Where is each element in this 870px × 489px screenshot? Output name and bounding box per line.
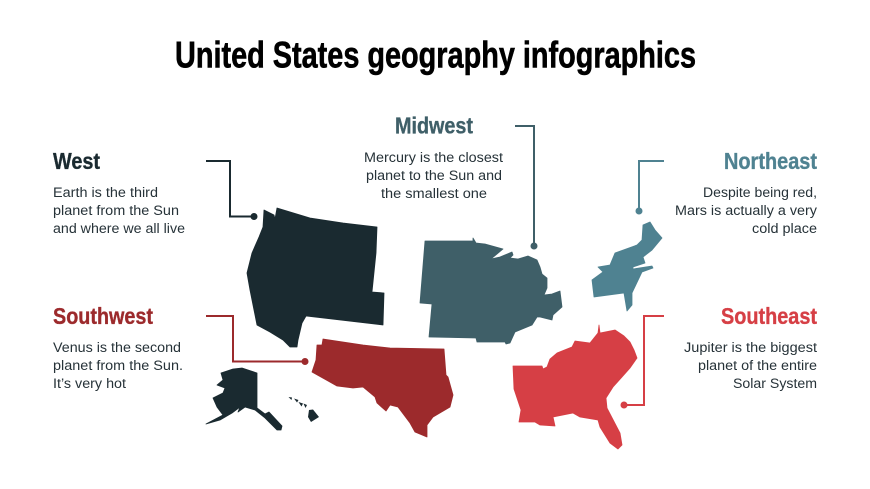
text block: Southwest: planet from the Sun. (53, 358, 183, 373)
text block: Midwest (364, 150, 503, 201)
text block: Northeast: cold place (752, 221, 817, 236)
panel: Southwest (53, 303, 183, 391)
map: Northeast region (592, 222, 662, 311)
title: United States geography infographics (175, 34, 696, 76)
text block: Midwest: planet to the Sun and (366, 168, 502, 183)
panel: West (53, 148, 185, 236)
text block: Northeast: Mars is actually a very (675, 203, 817, 218)
text block: West: and where we all live (53, 221, 185, 236)
text block: Southeast: planet of the entire (698, 358, 817, 373)
text block: Midwest: the smallest one (381, 186, 487, 201)
text block: Southwest: It’s very hot (53, 376, 126, 391)
text block: Northeast (675, 185, 817, 236)
text block: Southwest (53, 340, 183, 391)
text block: West (53, 185, 185, 236)
text block: Southeast (684, 340, 817, 391)
heading: Southeast: Southeast (721, 303, 817, 329)
heading: Southwest: Southwest (53, 303, 153, 329)
text block: Southeast: Jupiter is the biggest (684, 340, 817, 355)
connector: Northeast (636, 161, 664, 214)
panel: Midwest (364, 112, 503, 201)
panel: Southeast (684, 303, 817, 391)
connector: Southeast (620, 316, 664, 408)
text block: West: planet from the Sun (53, 203, 179, 218)
connector: Southwest (206, 316, 308, 365)
connector: West (206, 161, 258, 220)
text block: West: Earth is the third (53, 185, 158, 200)
heading: Midwest: Midwest (395, 112, 473, 138)
map: Hawaii (288, 397, 319, 422)
text block: Southwest: Venus is the second (53, 340, 181, 355)
map: West region (247, 208, 384, 347)
panel: Northeast (675, 148, 817, 236)
map: Alaska (206, 368, 282, 430)
map: Midwest region (420, 238, 562, 344)
text block: Southeast: Solar System (733, 376, 817, 391)
map: Southeast region (513, 325, 637, 449)
heading: Northeast: Northeast (724, 148, 817, 174)
heading: West: West (53, 148, 100, 174)
text block: Northeast: Despite being red, (703, 185, 817, 200)
map: Southwest region (312, 339, 453, 437)
connector: Midwest (515, 126, 538, 250)
text block: Midwest: Mercury is the closest (364, 150, 503, 165)
